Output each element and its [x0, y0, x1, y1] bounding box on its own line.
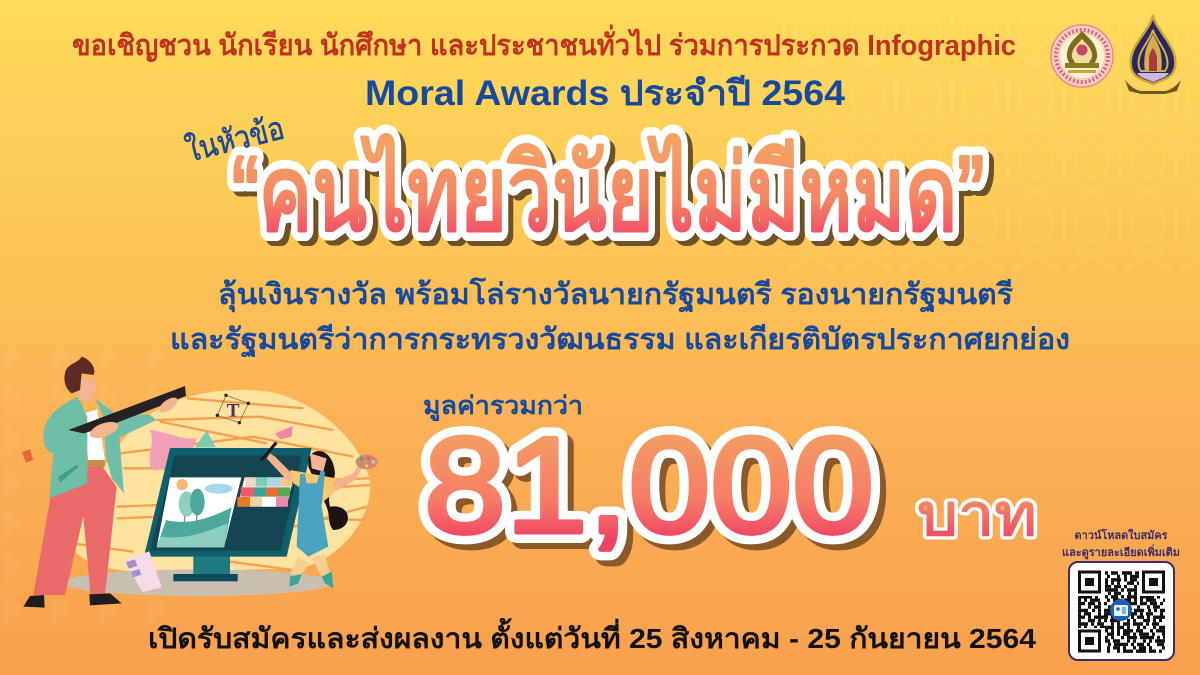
- text: application dates: เปิดรับสมัครและส่งผลงาน ตั้งแต่วันที่ 25 สิงหาคม - 25 กันยายน 2564: [148, 617, 1036, 654]
- man figure: [23, 357, 186, 608]
- floor shadow: [62, 569, 334, 596]
- prize amount: 81,000: [424, 409, 874, 561]
- prize amount: 81,000: [424, 409, 874, 561]
- QR caption: [1062, 528, 1180, 560]
- girl figure: [259, 426, 378, 588]
- teal leaf: [195, 431, 216, 447]
- small orange accent: [22, 449, 33, 463]
- triangle background pattern: [0, 350, 170, 630]
- floating T glyph frame: [216, 394, 250, 424]
- label: topic: ในหัวข้อ: [182, 110, 288, 169]
- hexagon background pattern: [780, 0, 1200, 270]
- QR centre icon: [1110, 599, 1132, 621]
- yellow backdrop blob: [72, 390, 370, 572]
- text: total value label: มูลค่ารวมกว่า: [423, 392, 583, 422]
- QR caption: และดูรายละเอียดเพิ่มเติม: [1062, 544, 1180, 560]
- currency: baht: บาท: [917, 483, 1037, 548]
- illustration: designers at a monitor: [22, 357, 378, 608]
- QR caption: ดาวน์โหลดใบสมัคร: [1074, 528, 1168, 542]
- colour swatches: [123, 551, 162, 592]
- text: prizes line 2: และรัฐมนตรีว่าการกระทรวงวัฒนธรรม และเกียรติบัตรประกาศยกย่อง: [170, 324, 1070, 358]
- text: prizes line 1: ลุ้นเงินรางวัล พร้อมโล่รางวัลนายกรัฐมนตรี รองนายกรัฐมนตรี: [218, 276, 1013, 313]
- logo: ministry seal: [1051, 25, 1113, 87]
- prize amount: 81,000: [430, 415, 880, 567]
- QR block: [1062, 528, 1180, 660]
- pink leaf: [149, 430, 197, 471]
- QR finder patterns: [1077, 570, 1167, 654]
- title: contest theme: “คนไทยวินัยไม่มีหมด”: [232, 135, 984, 253]
- logo: ministry of culture emblem: [1125, 15, 1181, 94]
- heading: Moral Awards: Moral Awards ประจำปี 2564: [365, 74, 846, 113]
- floating T glyph frame: T: [227, 401, 240, 422]
- monitor: [144, 448, 312, 581]
- QR card: [1069, 562, 1174, 660]
- backdrop streaks: [72, 398, 370, 570]
- QR code modules: [1078, 573, 1165, 651]
- title: contest theme: “คนไทยวินัยไม่มีหมด”: [232, 135, 984, 253]
- currency: baht: บาท: [917, 483, 1037, 548]
- heading: invitation line: ขอเชิญชวน นักเรียน นักศึกษา และประชาชนทั่วไป ร่วมการประกวด Infographic: [72, 24, 1016, 63]
